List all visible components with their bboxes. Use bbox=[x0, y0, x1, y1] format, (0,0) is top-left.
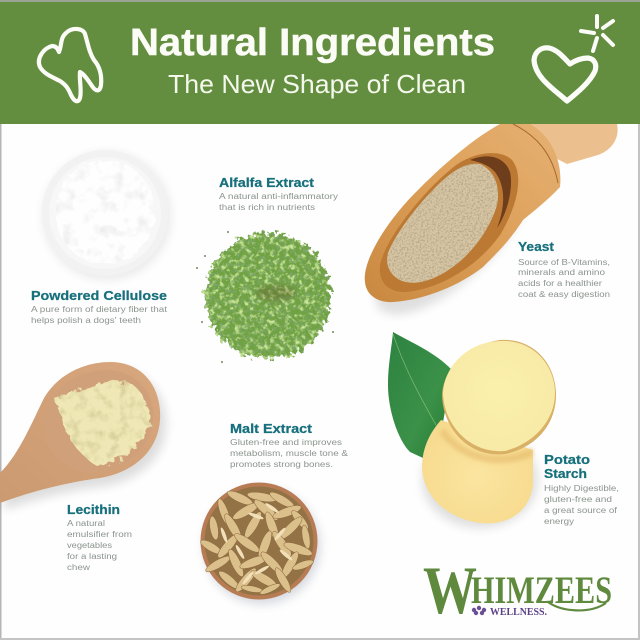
yeast granules bbox=[387, 164, 498, 283]
scoop hollow bbox=[380, 153, 518, 292]
label: lecithin: emulsifier from bbox=[67, 530, 132, 539]
spoon bbox=[0, 362, 160, 503]
label: alfalfa extract: A natural anti-inflammatory bbox=[219, 192, 338, 201]
label: powdered cellulose: A pure form of dietary fiber that bbox=[31, 305, 168, 314]
icon: tooth bbox=[39, 29, 101, 101]
label: lecithin bbox=[67, 502, 132, 572]
shadow under upper slice bbox=[440, 428, 533, 463]
label: lecithin: vegetables bbox=[67, 541, 112, 550]
logo: Whimzees by Wellness: WELLNESS. bbox=[490, 607, 547, 618]
logo: Whimzees by Wellness: W bbox=[423, 552, 477, 628]
label: yeast: acids for a healthier bbox=[518, 279, 602, 288]
label: powdered cellulose: helps polish a dogs' teeth bbox=[31, 316, 141, 325]
label: yeast bbox=[518, 239, 610, 299]
image: wooden spoon with lecithin bbox=[0, 362, 166, 510]
label: potato starch: gluten-free and bbox=[544, 495, 612, 504]
lower potato slice bbox=[422, 420, 533, 523]
label: lecithin: A natural bbox=[67, 519, 105, 528]
label: lecithin: Lecithin bbox=[67, 502, 120, 517]
label: potato starch: a great source of bbox=[544, 506, 618, 515]
panel: yeast scoop bbox=[354, 124, 618, 337]
malt grains bbox=[199, 488, 315, 596]
image: potato slices and leaf bbox=[388, 332, 556, 528]
logo flourish bbox=[548, 602, 606, 610]
upper potato slice bbox=[442, 340, 556, 454]
label: alfalfa extract: that is rich in nutrients bbox=[219, 203, 315, 212]
label: powdered cellulose: Powdered Cellulose bbox=[31, 288, 167, 303]
label: potato starch: Potato bbox=[544, 452, 590, 467]
label: powdered cellulose bbox=[31, 288, 168, 325]
label: malt extract bbox=[230, 421, 349, 469]
potato leaf bbox=[388, 332, 452, 458]
label: malt extract: Malt Extract bbox=[230, 421, 313, 436]
label: alfalfa extract bbox=[219, 175, 338, 212]
subtitle: The New Shape of Clean bbox=[168, 69, 466, 99]
white bowl bbox=[42, 150, 168, 276]
label: potato starch: Highly Digestible, bbox=[544, 484, 619, 493]
label: lecithin: for a lasting bbox=[67, 552, 117, 561]
image: alfalfa sprouts bbox=[196, 231, 334, 363]
label: potato starch bbox=[544, 452, 619, 526]
label: alfalfa extract: Alfalfa Extract bbox=[219, 175, 315, 190]
label: malt extract: Gluten-free and improves bbox=[230, 438, 342, 447]
icon: heart with sparkle bbox=[534, 16, 613, 101]
label: malt extract: metabolism, muscle tone & bbox=[230, 449, 349, 458]
panel: header band bbox=[0, 0, 640, 124]
label: yeast: Yeast bbox=[518, 239, 555, 254]
logo: Whimzees by Wellness bbox=[423, 552, 612, 628]
lecithin powder bbox=[56, 381, 150, 468]
label: yeast: coat & easy digestion bbox=[518, 290, 610, 299]
label: potato starch: energy bbox=[544, 517, 574, 526]
label: yeast: Source of B-Vitamins, bbox=[518, 258, 610, 267]
label: malt extract: promotes strong bones. bbox=[230, 460, 333, 469]
label: lecithin: chew bbox=[67, 563, 90, 572]
image: bowl of malt grains bbox=[199, 482, 320, 604]
logo flower mark bbox=[472, 606, 486, 615]
wooden bowl bbox=[200, 482, 318, 600]
scoop body bbox=[365, 124, 560, 302]
title: Natural Ingredients bbox=[130, 22, 495, 64]
cellulose powder bbox=[55, 160, 155, 264]
panel: powdered cellulose bowl bbox=[42, 150, 171, 280]
label: potato starch: Starch bbox=[544, 466, 587, 481]
label: yeast: minerals and amino bbox=[518, 268, 606, 277]
scoop handle bbox=[520, 124, 618, 164]
